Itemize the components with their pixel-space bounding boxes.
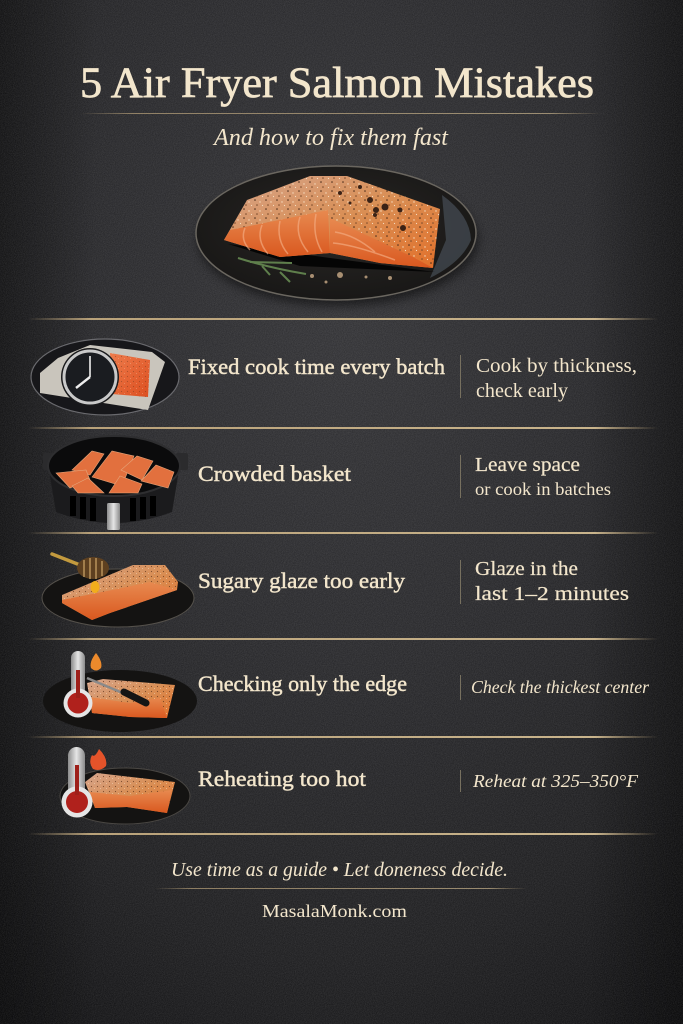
row 4: checking only the edge [43, 651, 650, 732]
fix text [476, 355, 637, 402]
mistake text: Reheating too hot [198, 766, 366, 791]
website: MasalaMonk.com [262, 901, 407, 921]
subtitle: And how to fix them fast [212, 125, 449, 151]
fix text: or cook in batches [475, 479, 611, 499]
fix text: Cook by thickness, [476, 355, 637, 377]
title: 5 Air Fryer Salmon Mistakes [80, 60, 594, 107]
row 3: sugary glaze [42, 554, 629, 627]
icon: honey dipper and salmon [42, 554, 194, 627]
fix text: last 1–2 minutes [475, 583, 629, 605]
fix text: Check the thickest center [471, 677, 650, 697]
fix text [475, 454, 611, 499]
fix text [475, 558, 629, 605]
mistake text: Crowded basket [198, 461, 351, 486]
row 1: fixed cook time [31, 339, 637, 415]
row 5: reheating too hot [60, 747, 639, 824]
fix text: Leave space [475, 454, 580, 476]
icon: thermometer, tongs and salmon [43, 651, 197, 732]
fix text: check early [476, 380, 568, 402]
fix text: Glaze in the [475, 558, 578, 580]
mistake text: Checking only the edge [198, 671, 407, 696]
row 2: crowded basket [43, 436, 611, 530]
fix text: Reheat at 325–350°F [472, 771, 639, 791]
hero image: salmon on plate [196, 166, 478, 306]
mistake text: Fixed cook time every batch [188, 354, 445, 379]
footer tagline: Use time as a guide • Let doneness decide. [171, 859, 508, 881]
mistake text: Sugary glaze too early [198, 568, 405, 593]
icon: air fryer basket [43, 436, 188, 530]
icon: clock on salmon plate [31, 339, 179, 415]
icon: thermometer, flame and salmon [60, 747, 190, 824]
